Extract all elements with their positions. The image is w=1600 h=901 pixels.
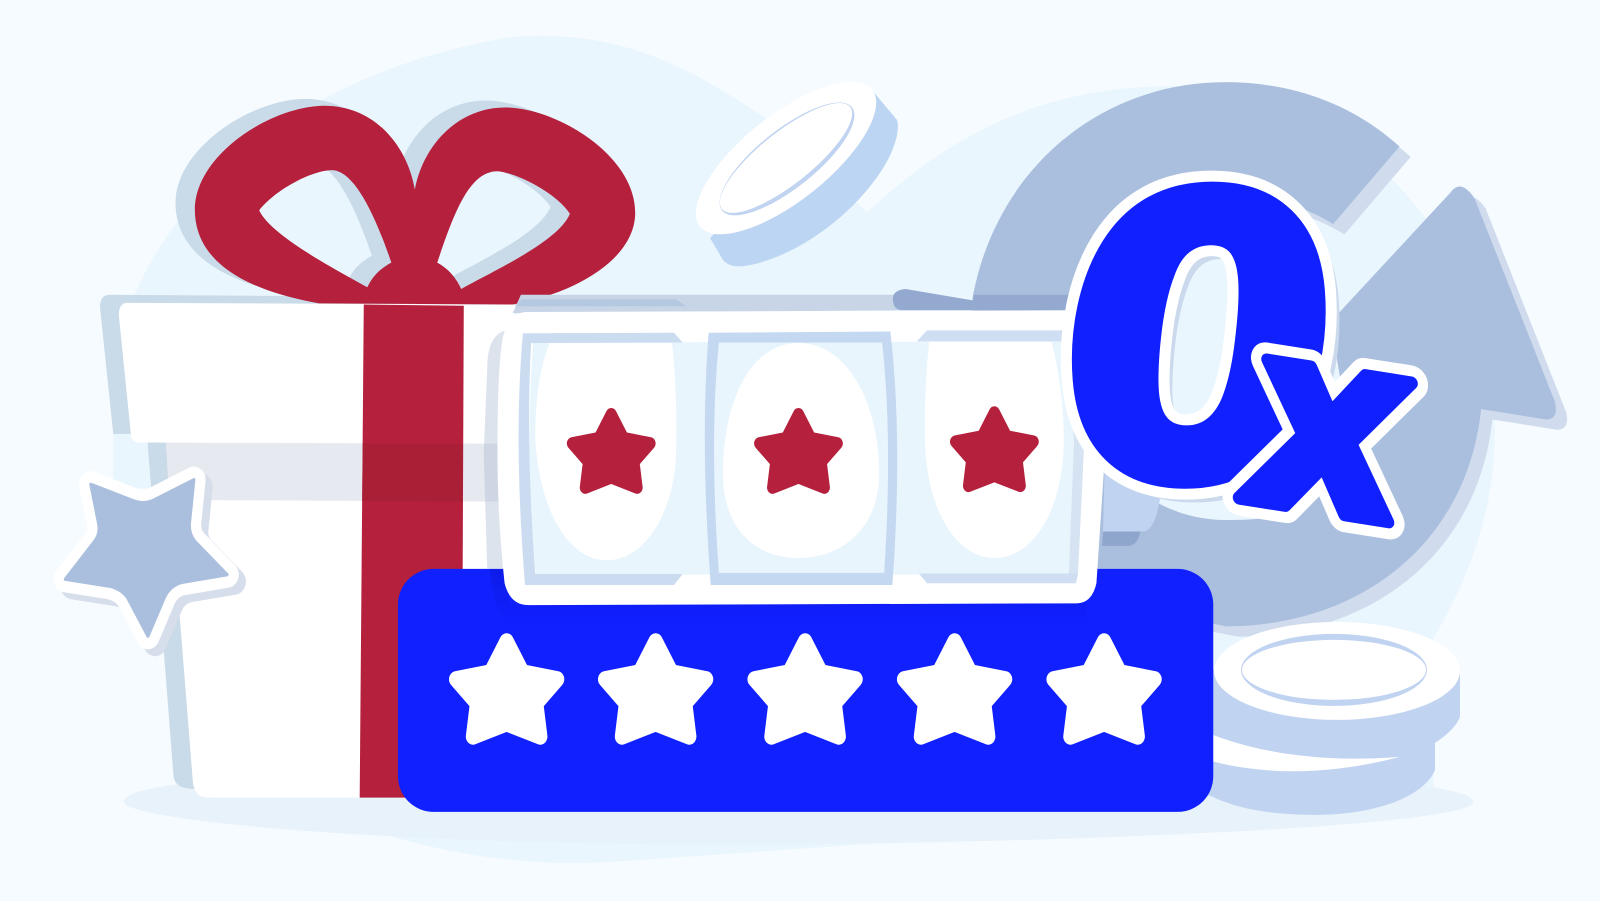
star badge <box>65 480 234 643</box>
gift shadow <box>100 295 689 789</box>
ground shadow <box>124 781 1473 845</box>
zero outline: 0 <box>1045 117 1354 569</box>
slot drop shadow on panel <box>490 569 1087 626</box>
stars panel <box>398 569 1213 812</box>
box behind the 0 <box>1102 468 1161 546</box>
background blob <box>113 36 1495 863</box>
coin stack <box>1190 622 1460 815</box>
x outline: x <box>1238 255 1413 587</box>
reels window <box>529 341 1074 575</box>
gift box <box>119 303 515 798</box>
reel 3 <box>917 330 1084 583</box>
box body <box>166 442 510 798</box>
slot machine <box>497 310 1105 605</box>
reel 2 <box>705 332 897 585</box>
circular arrow <box>972 82 1567 637</box>
ribbon <box>360 305 464 798</box>
x: x <box>1238 255 1413 587</box>
zero: 0 <box>1045 117 1354 569</box>
lid shadow band <box>166 442 510 502</box>
ribbon shaded band <box>362 444 463 502</box>
slot frame side shadow <box>484 330 505 569</box>
flying coin <box>673 56 899 266</box>
multiplier text 0x <box>1045 117 1413 587</box>
lid <box>119 303 515 444</box>
bow <box>195 106 635 305</box>
reel 1 <box>519 333 683 585</box>
zero shadow: 0 <box>1054 126 1363 578</box>
star rating <box>456 641 1155 737</box>
bow shadow <box>176 99 616 298</box>
top shadow of slot frame <box>513 289 1074 313</box>
slot frame <box>497 310 1105 605</box>
